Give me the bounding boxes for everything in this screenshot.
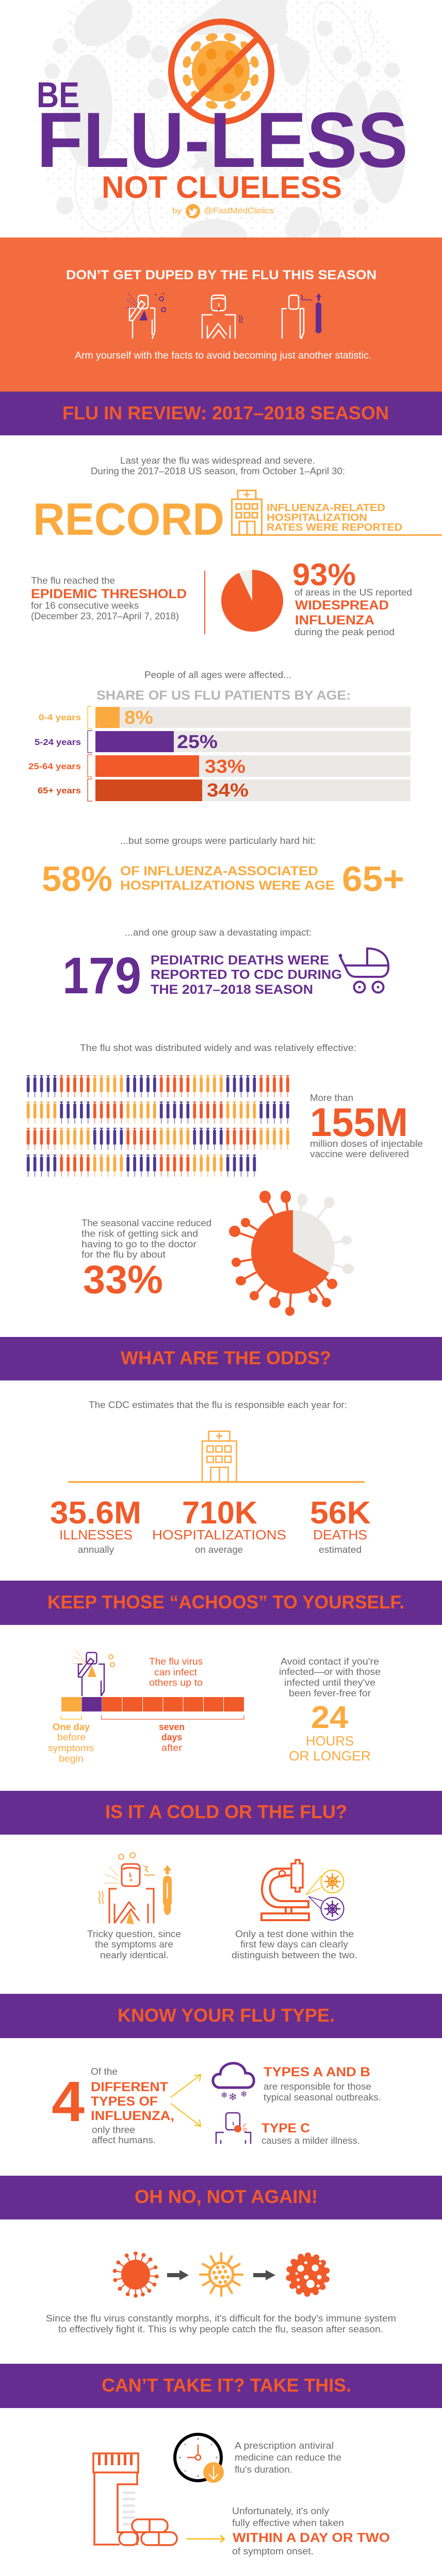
text: only a test: first few days can clearly — [240, 1939, 348, 1950]
icon: person sneezing lightly — [216, 2113, 251, 2144]
icon: yellow virus — [200, 2253, 242, 2296]
icon: microscope — [261, 1860, 343, 1920]
panel: flu in review — [27, 455, 442, 1315]
text: cdc estimates: The CDC estimates that the flu is responsible each year for: — [89, 1400, 347, 1410]
caption: seven days after: seven — [159, 1722, 185, 1732]
icon: cloud with snow — [213, 2063, 254, 2103]
stat: hospitalizations: on average — [195, 1545, 243, 1555]
stat: 155M doses: million doses of injectable — [310, 1139, 423, 1149]
epidemic threshold text: EPIDEMIC THRESHOLD — [31, 587, 187, 601]
text: tricky question: the symptoms are — [95, 1939, 173, 1950]
stat: 33 percent: having to go to the doctor — [81, 1239, 197, 1249]
bar chart: share of flu patients by age: SHARE OF US FLU PATIENTS BY AGE: — [96, 688, 351, 703]
intro text: Last year the flu was widespread and severe. — [120, 455, 315, 466]
stat: 33 percent — [81, 1218, 211, 1302]
bar chart: share of flu patients by age: 0-4 years — [39, 713, 81, 722]
text: tricky question: nearly identical. — [100, 1950, 169, 1960]
panel: antiviral medicine — [93, 2434, 390, 2556]
stat: deaths: 56K — [310, 1495, 371, 1530]
bar chart: share of flu patients by age: 34% — [207, 779, 249, 801]
header panel — [37, 0, 406, 238]
text: virus morphs: Since the flu virus constantly morphs, it's difficult for the body's immune system — [46, 2313, 396, 2324]
icon: banned virus — [171, 22, 271, 122]
panel: don't get duped — [0, 238, 442, 392]
icon: mutated virus — [286, 2252, 330, 2297]
text: prescription antiviral — [235, 2441, 341, 2475]
epidemic threshold text: (December 23, 2017–April 7, 2018) — [31, 611, 179, 621]
stat: 179 pediatric deaths: PEDIATRIC DEATHS WERE — [151, 953, 329, 968]
banner heading: cold or flu — [0, 1791, 442, 1835]
text: prescription antiviral: medicine can reduce the — [235, 2452, 341, 2463]
stat: 179 pediatric deaths: REPORTED TO CDC DURING — [151, 968, 342, 982]
stat: 24 hours — [289, 1700, 371, 1764]
caption: seven days after — [159, 1722, 185, 1753]
text: within a day or two: WITHIN A DAY OR TWO — [233, 2531, 390, 2545]
text: devastating impact: ...and one group saw a devastating impact: — [125, 927, 312, 938]
panel: achoos timeline — [48, 1650, 381, 1764]
text: avoid contact: infected until they've — [284, 1677, 375, 1688]
stat: 179 pediatric deaths — [62, 947, 342, 1005]
bar chart: share of flu patients by age: 8% — [124, 707, 153, 728]
byline: by — [172, 207, 182, 215]
pictogram: syringes — [27, 1075, 289, 1177]
arrows — [171, 2075, 201, 2126]
icon: feverish person — [282, 293, 322, 339]
icon: sick person — [99, 1853, 172, 1924]
stat: 58 percent: 65+ — [342, 859, 404, 899]
panel: what are the odds — [50, 1400, 371, 1555]
stat: illnesses — [50, 1495, 141, 1555]
stat: 33 percent: The seasonal vaccine reduced — [81, 1218, 211, 1228]
text: within a day or two: of symptom onset. — [232, 2546, 314, 2556]
record stat: HOSPITALIZATION — [267, 512, 367, 523]
record stat — [33, 494, 402, 545]
title — [37, 75, 408, 205]
pie chart: 93 percent — [221, 570, 283, 632]
widespread stat: during the peak period — [294, 627, 395, 637]
text block: Arm yourself with the facts to avoid becoming just another statistic. — [75, 350, 371, 361]
text: only a test: distinguish between the two. — [232, 1950, 357, 1960]
caption: flu virus can infect: can infect — [154, 1667, 197, 1677]
banner heading: oh no not again — [0, 2176, 442, 2219]
arrow — [167, 2270, 189, 2280]
stat: hospitalizations: HOSPITALIZATIONS — [152, 1527, 286, 1543]
panel: virus morphs — [46, 2252, 396, 2334]
text: avoid contact: Avoid contact if you're — [281, 1656, 379, 1667]
stat: 33 percent: the risk of getting sick and — [81, 1228, 198, 1239]
text: types a and b — [264, 2065, 381, 2103]
text: prescription antiviral: flu's duration. — [235, 2465, 292, 2475]
stat: 155M doses: vaccine were delivered — [310, 1149, 409, 1159]
text: virus morphs: to effectively fight it. This is why people catch the flu, season after season. — [58, 2324, 383, 2334]
widespread stat — [292, 557, 412, 637]
timeline bar — [61, 1697, 244, 1719]
caption: one day before: symptoms — [48, 1743, 94, 1753]
heading: DON’T GET DUPED BY THE FLU THIS SEASON — [66, 268, 376, 282]
stat: four types: 4 — [52, 2070, 85, 2133]
bar chart: share of flu patients by age: 25-64 years — [28, 761, 81, 771]
stat: deaths: DEATHS — [313, 1527, 367, 1543]
widespread stat: WIDESPREAD — [295, 598, 389, 613]
caption: seven days after: days — [161, 1732, 182, 1742]
stat: 58 percent: OF INFLUENZA-ASSOCIATED — [120, 864, 318, 878]
bar chart: share of flu patients by age — [28, 688, 411, 801]
icon: coughing person — [202, 295, 242, 338]
stat: 33 percent: 33% — [83, 1258, 163, 1302]
banner heading: flu in review: FLU IN REVIEW: 2017–2018 SEASON — [62, 402, 389, 423]
stat: 24 hours: OR LONGER — [289, 1748, 371, 1764]
stat: hospitalizations — [152, 1495, 286, 1555]
record stat: RECORD — [33, 494, 224, 545]
arrow — [186, 2535, 224, 2543]
bar chart: share of flu patients by age: 25% — [177, 731, 218, 752]
caption: flu virus can infect: The flu virus — [149, 1656, 203, 1667]
stat: four types: DIFFERENT — [91, 2080, 168, 2094]
intro text: During the 2017–2018 US season, from October 1–April 30: — [91, 466, 345, 476]
record stat: RATES WERE REPORTED — [267, 522, 402, 533]
banner heading: cant take it — [0, 2364, 442, 2408]
title: BE — [37, 75, 79, 115]
stat: 155M doses: 155M — [310, 1099, 408, 1145]
widespread stat: 93% — [292, 557, 356, 592]
banner heading: cold or flu: IS IT A COLD OR THE FLU? — [105, 1801, 347, 1822]
stat: four types: Of the — [91, 2066, 118, 2077]
text: types a and b: are responsible for those — [264, 2081, 371, 2092]
stat: 155M doses: More than — [310, 1093, 353, 1103]
text: virus morphs — [46, 2313, 396, 2334]
icon: clock — [175, 2434, 224, 2483]
epidemic threshold text: for 16 consecutive weeks — [31, 601, 139, 611]
bar chart: share of flu patients by age: 5-24 years — [35, 737, 81, 747]
text: avoid contact: infected—or with those — [279, 1667, 381, 1677]
stat: illnesses: annually — [78, 1545, 114, 1555]
background microbes — [37, 0, 406, 238]
bar chart: share of flu patients by age: 65+ years — [38, 786, 81, 795]
text: avoid contact: been fever-free for — [289, 1688, 371, 1698]
stat: 179 pediatric deaths: 179 — [62, 947, 141, 1005]
icon: hospital — [232, 490, 442, 535]
text: within a day or two — [232, 2506, 390, 2556]
text: types a and b: typical seasonal outbreaks. — [264, 2092, 381, 2103]
caption: one day before — [48, 1722, 94, 1764]
caption: one day before: before — [57, 1732, 86, 1742]
intro text — [91, 455, 345, 476]
title: FLU-LESS — [37, 96, 408, 184]
stat: hospitalizations: 710K — [182, 1495, 257, 1530]
stat: illnesses: ILLNESSES — [59, 1527, 133, 1543]
text: hard hit: ...but some groups were particularly hard hit: — [120, 836, 316, 846]
banner heading: what are the odds — [0, 1337, 442, 1381]
stat: 24 hours: HOURS — [306, 1733, 354, 1749]
icon: sneezing person — [73, 1650, 114, 1696]
banner heading: know your flu type: KNOW YOUR FLU TYPE. — [118, 2005, 335, 2026]
byline — [172, 204, 274, 218]
byline: @FastMedClinics — [204, 207, 274, 215]
bar chart: share of flu patients by age: 33% — [205, 756, 245, 777]
stat: deaths: estimated — [319, 1545, 362, 1555]
widespread stat: INFLUENZA — [295, 613, 374, 628]
stat: 24 hours: 24 — [311, 1700, 348, 1735]
text: prescription antiviral: A prescription antiviral — [235, 2441, 334, 2451]
text: types a and b: TYPES A AND B — [264, 2065, 370, 2079]
text: flu shot distributed: The flu shot was distributed widely and was relatively effective: — [80, 1043, 356, 1053]
text: within a day or two: fully effective when taken — [232, 2518, 344, 2528]
icon: cloud with snow: ❄ — [221, 2091, 227, 2100]
stat: four types: only three — [92, 2125, 135, 2135]
banner heading: keep those achoos: KEEP THOSE “ACHOOS” TO YOURSELF. — [47, 1591, 404, 1613]
banner heading: what are the odds: WHAT ARE THE ODDS? — [121, 1347, 331, 1368]
text: avoid contact — [279, 1656, 381, 1698]
icon: stroller — [338, 948, 388, 992]
text: only a test: Only a test done within the — [235, 1929, 354, 1939]
stat: four types — [52, 2066, 174, 2145]
text: tricky question: Tricky question, since — [87, 1929, 181, 1939]
caption: seven days after: after — [161, 1742, 182, 1753]
text: type c: TYPE C — [261, 2121, 310, 2136]
epidemic threshold text: The flu reached the — [31, 575, 115, 586]
caption: flu virus can infect: others up to — [149, 1677, 203, 1688]
icon: pill bottle — [93, 2453, 177, 2545]
text: type c — [261, 2121, 360, 2146]
banner heading: know your flu type — [0, 1994, 442, 2038]
text: within a day or two: Unfortunately, it's only — [232, 2506, 329, 2516]
title: NOT CLUELESS — [102, 170, 342, 205]
caption: flu virus can infect — [149, 1656, 203, 1688]
record stat: INFLUENZA-RELATED — [267, 502, 385, 514]
stat: 58 percent: HOSPITALIZATIONS WERE AGE — [120, 878, 335, 893]
chart: virus pie — [230, 1192, 353, 1315]
stat: 179 pediatric deaths: THE 2017–2018 SEASON — [151, 982, 313, 997]
banner heading: cant take it: CAN’T TAKE IT? TAKE THIS. — [102, 2375, 351, 2396]
stat: 58 percent: 58% — [42, 859, 112, 899]
arrow — [253, 2270, 275, 2280]
icon: cloud with snow: ❄ — [228, 2092, 237, 2103]
banner heading: flu in review — [0, 392, 442, 435]
epidemic threshold text — [31, 575, 187, 621]
icon: orange virus — [113, 2252, 159, 2297]
panel: cold or flu — [87, 1853, 357, 1960]
text: people of all ages: People of all ages were affected... — [144, 670, 291, 680]
stat: deaths — [310, 1495, 371, 1555]
text: type c: causes a milder illness. — [261, 2136, 360, 2146]
stat: 33 percent: for the flu by about — [81, 1249, 166, 1260]
text: tricky question — [87, 1929, 181, 1960]
banner heading: keep those achoos — [0, 1581, 442, 1625]
stat: 58 percent — [42, 859, 404, 899]
banner heading: oh no not again: OH NO, NOT AGAIN! — [135, 2186, 318, 2207]
icon: hospital on line — [68, 1431, 365, 1482]
caption: one day before: One day — [53, 1722, 90, 1732]
icon: cloud with snow: ❄ — [240, 2090, 247, 2099]
icon: sneezing person — [124, 292, 166, 339]
stat: illnesses: 35.6M — [50, 1495, 141, 1530]
stat: four types: INFLUENZA, — [91, 2109, 174, 2123]
stat: four types: affect humans. — [92, 2135, 156, 2145]
caption: one day before: begin — [59, 1754, 84, 1764]
panel: flu types — [52, 2063, 381, 2146]
widespread stat: of areas in the US reported — [294, 587, 412, 598]
text: only a test — [232, 1929, 357, 1960]
stat: 155M doses — [310, 1093, 423, 1159]
stat: four types: TYPES OF — [91, 2094, 158, 2109]
